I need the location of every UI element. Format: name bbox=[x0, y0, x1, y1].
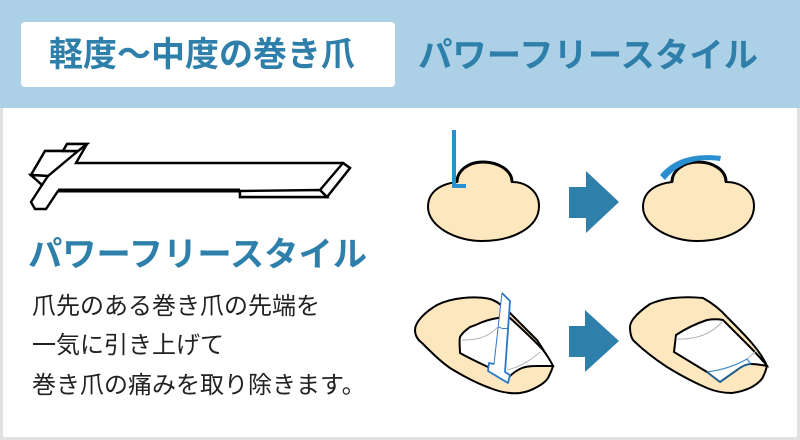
icon: blue tool on nail bbox=[488, 293, 510, 383]
diagram: finger before bbox=[415, 293, 553, 393]
description text: 巻き爪の痛みを取り除きます。 bbox=[32, 372, 366, 399]
description text: 爪先のある巻き爪の先端を bbox=[32, 293, 320, 320]
header label box bbox=[21, 22, 395, 87]
header title: パワーフリースタイル bbox=[418, 37, 758, 75]
header band bbox=[0, 0, 800, 108]
arrow: top bbox=[569, 171, 619, 233]
icon: lifted nail brace bbox=[660, 155, 721, 180]
diagram: nail cross-section before bbox=[428, 130, 539, 241]
description text bbox=[32, 293, 366, 399]
subheading: パワーフリースタイル bbox=[28, 236, 367, 274]
diagram: finger after bbox=[630, 297, 767, 393]
arrow: bottom bbox=[569, 310, 619, 372]
header label box: 軽度～中度の巻き爪 bbox=[49, 36, 355, 74]
icon: tool inserted under nail bbox=[452, 130, 466, 188]
icon: blue lifted nail brace bbox=[707, 359, 751, 382]
nail plate bbox=[674, 319, 767, 382]
nail plate bbox=[460, 317, 553, 377]
diagram: nail cross-section after bbox=[643, 155, 754, 241]
icon: power free style tool bbox=[31, 144, 350, 209]
description text: 一気に引き上げて bbox=[32, 332, 224, 359]
